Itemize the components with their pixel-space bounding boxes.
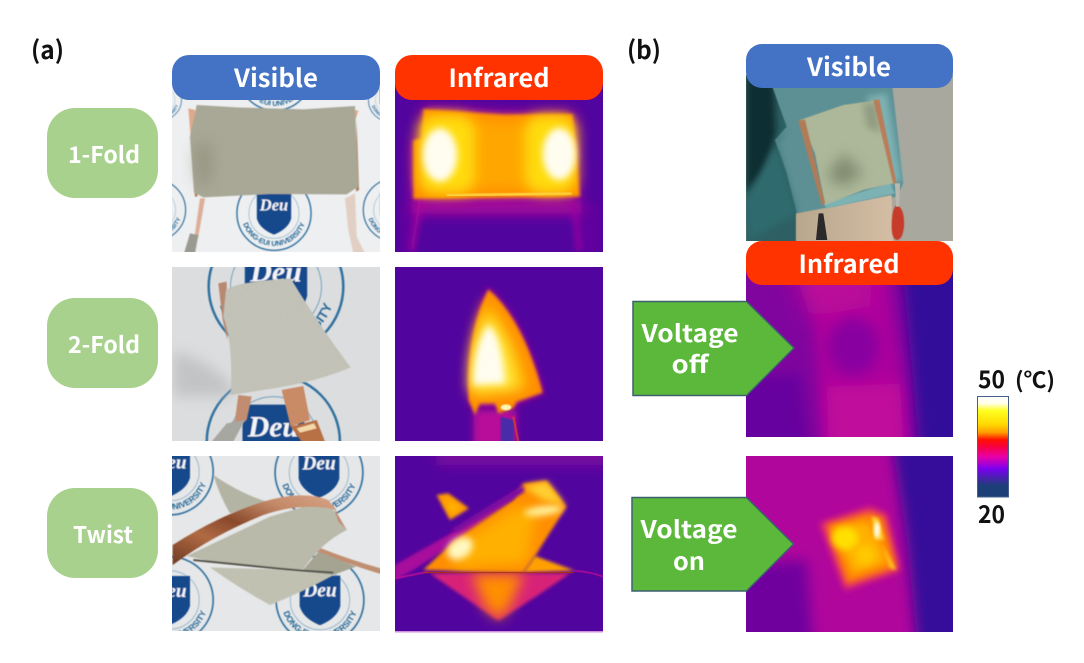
color scale legend: (℃) (1015, 363, 1055, 395)
arrow: Voltage off: Voltage (640, 314, 738, 349)
photo: 2-fold visible (172, 267, 380, 441)
photo: 1-fold visible (172, 84, 380, 252)
row label: 1-Fold: 1-Fold (68, 136, 140, 170)
header: Visible (a): Visible (233, 59, 318, 95)
color scale legend: 20 (978, 495, 1005, 530)
thermal image: twist infrared (395, 443, 610, 631)
header: Infrared (a): Infrared (448, 59, 550, 95)
arrow: Voltage off: off (672, 345, 710, 380)
row label: Twist (47, 488, 158, 578)
header: Visible (a) (172, 55, 380, 100)
header: Infrared (b): Infrared (798, 245, 900, 281)
row label: Twist: Twist (73, 516, 133, 550)
arrow: Voltage on: Voltage (639, 510, 738, 545)
panel label: (a): (a) (31, 31, 64, 67)
row label: 1-Fold (47, 108, 158, 198)
header: Visible (b) (746, 44, 953, 88)
thermal image: voltage on (746, 456, 953, 632)
photo: twist visible (172, 456, 380, 631)
row label: 2-Fold: 2-Fold (68, 326, 140, 360)
arrow: Voltage on (632, 498, 794, 591)
photo: arm visible (746, 73, 953, 243)
header: Infrared (b) (746, 241, 953, 285)
color scale legend (978, 360, 1055, 530)
arrow: Voltage off (633, 302, 794, 396)
thermal image: voltage off (746, 269, 953, 437)
header: Visible (b): Visible (806, 48, 891, 84)
thermal image: 1-fold infrared (395, 78, 603, 253)
arrow: Voltage on: on (673, 542, 705, 577)
row label: 2-Fold (47, 298, 158, 388)
panel label: (b): (b) (627, 31, 661, 67)
header: Infrared (a) (395, 55, 603, 100)
thermal image: 2-fold infrared (395, 267, 603, 447)
color scale legend: 50 (978, 360, 1005, 395)
